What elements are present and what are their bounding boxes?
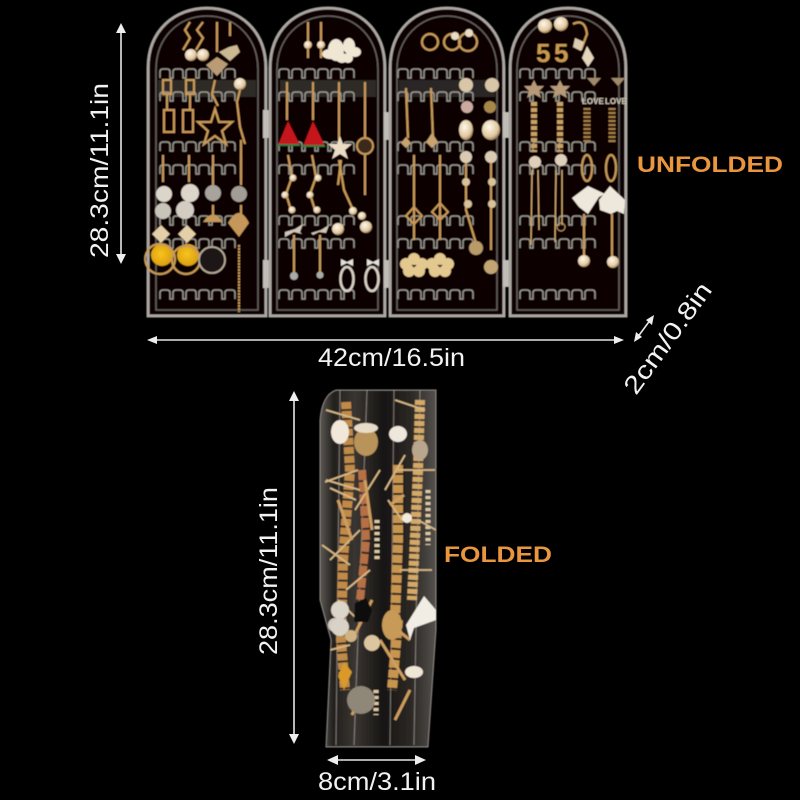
earrings: star and medallion	[328, 82, 373, 235]
panel: unfolded display	[145, 8, 627, 316]
text: folded width: 8cm/3.1in	[318, 768, 436, 796]
arrow: unfolded width	[147, 336, 624, 344]
earrings: thin drops	[401, 88, 448, 240]
label: unfolded: UNFOLDED	[637, 152, 783, 177]
earrings: pearl drops	[282, 155, 322, 214]
panel 3	[390, 8, 512, 316]
earrings: crystals and fans	[203, 155, 249, 237]
text: unfolded width: 42cm/16.5in	[318, 344, 465, 372]
earrings: gold rectangles	[163, 80, 194, 132]
folded jewellery columns	[322, 400, 436, 720]
earrings: small hoops	[422, 29, 477, 51]
earrings: LOVE fans: LOVE	[582, 97, 604, 106]
text: unfolded height: 28.3cm/11.1in	[86, 83, 114, 258]
earrings: bows and ovals	[285, 224, 379, 291]
hinges	[263, 110, 272, 288]
earrings: star tassels	[524, 80, 570, 245]
hinges	[503, 112, 512, 287]
earrings: flower chains	[460, 151, 498, 274]
earrings: long tassel	[234, 78, 246, 312]
earrings: pearl 55	[536, 17, 594, 68]
earrings: star	[198, 80, 232, 144]
earrings: shells	[155, 155, 199, 219]
panel 4	[510, 8, 627, 316]
arrow: folded height	[289, 391, 299, 744]
earrings: pearl 55: 5	[536, 38, 550, 68]
earrings: top row hearts and pearls	[183, 22, 240, 76]
earrings: LOVE fans	[572, 78, 627, 268]
text: folded height: 28.3cm/11.1in	[255, 487, 283, 655]
folded highlights	[328, 420, 436, 714]
hinges	[384, 112, 393, 288]
panel: folded display	[320, 390, 436, 747]
arrow: unfolded height	[116, 23, 126, 264]
arrow: depth	[634, 315, 654, 342]
panel 1	[145, 8, 272, 316]
panel edges	[336, 390, 420, 745]
earrings: plum flowers	[400, 253, 454, 277]
text: depth: 2cm/0.8in	[618, 277, 718, 400]
earrings: pearl 55: 5	[554, 38, 568, 68]
earrings: watermelon	[277, 82, 325, 146]
earrings: LOVE fans: LOVE	[605, 97, 627, 106]
earrings: flowers and pearls	[304, 22, 361, 63]
panel 2	[270, 8, 393, 316]
earrings: pink gem drops	[459, 78, 500, 140]
earrings: yellow discs	[145, 225, 225, 274]
arrow: folded width	[327, 755, 426, 765]
label: folded: FOLDED	[444, 542, 552, 567]
